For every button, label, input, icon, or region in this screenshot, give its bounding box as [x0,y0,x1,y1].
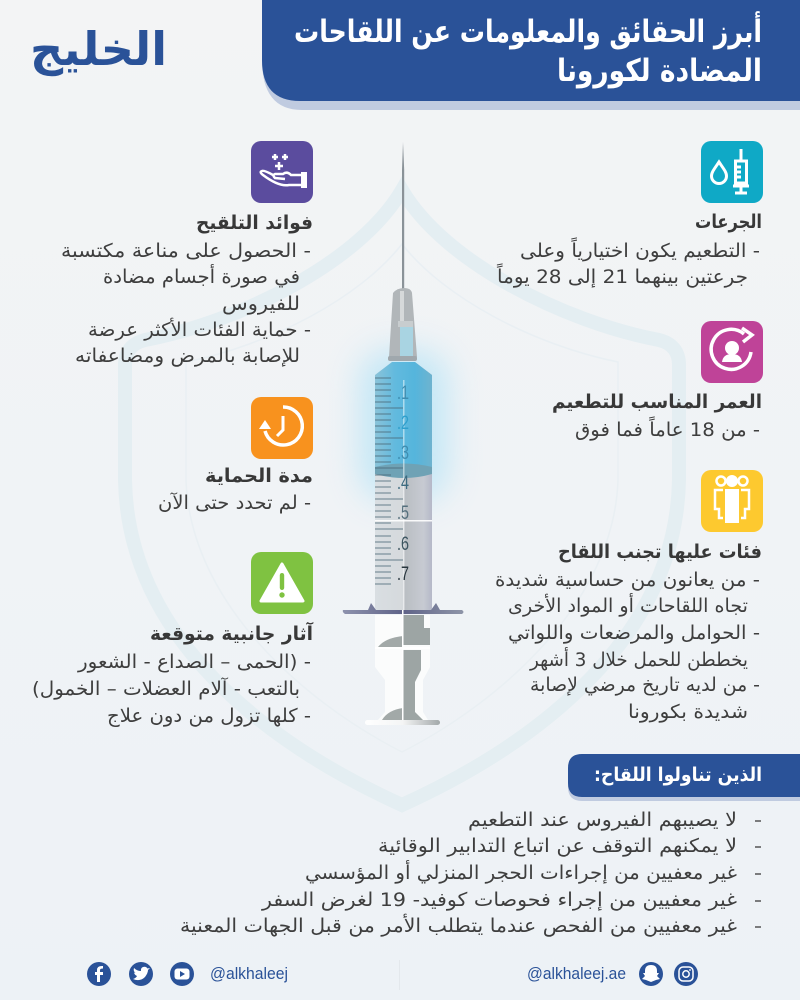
text: vaccination benefits: - حماية الفئات الأكثر عرضة [88,318,311,341]
text: vaccination benefits: للفيروس [222,293,300,315]
icon: snapchat [639,962,663,986]
panel: protection duration [158,397,313,514]
text: vaccination benefits: - الحصول على مناعة مكتسبة [61,240,311,262]
plunger [365,610,440,725]
panel: doses [497,141,763,289]
icon: droplet and syringe [701,141,763,203]
panel: groups to avoid vaccine [495,470,763,723]
heading: groups to avoid vaccine: فئات عليها تجنب اللقاح [558,541,762,563]
scale numbers: .6 [397,534,409,555]
list: غير معفيين من الفحص عندما يتطلب الأمر من قبل الجهات المعنية [180,914,737,937]
text: expected side effects: - (الحمى – الصداع - الشعور [77,651,311,673]
heading: protection duration: مدة الحماية [205,465,313,487]
heading bar [568,754,800,801]
icon: clock with arrow [251,397,313,459]
text: groups to avoid vaccine: - من يعانون من حساسية شديدة [495,569,760,591]
handle left: @alkhaleej [210,964,288,983]
text: protection duration: - لم تحدد حتى الآن [158,492,311,514]
needle [402,142,404,290]
needle hub [388,288,417,361]
text: vaccination benefits [61,240,311,367]
text: expected side effects: بالتعب - آلام العضلات – الخمول) [32,676,300,700]
icon: youtube [170,962,194,986]
icon: facebook [87,962,111,986]
footer social [87,960,698,990]
text: groups to avoid vaccine [495,569,760,723]
barrel with vaccine [375,362,432,611]
icon: instagram [674,962,698,986]
panel: expected side effects [32,552,313,727]
shield watermark [125,190,679,805]
list: غير معفيين من إجراء فحوصات كوفيد- 19 لغرض السفر [261,889,737,912]
text: vaccination benefits: في صورة أجسام مضادة [103,264,300,288]
scale ticks [375,378,403,584]
text: groups to avoid vaccine: - الحوامل والمرضعات واللواتي [508,622,760,644]
panel: vaccination benefits [61,141,313,367]
scale numbers [397,383,409,585]
list [180,809,761,937]
panel: those who took the vaccine [180,754,800,937]
scale numbers: .7 [397,564,409,585]
finger flange [343,603,464,614]
list: لا يمكنهم التوقف عن اتباع التدابير الوقائية [378,835,737,857]
scale numbers: .5 [397,503,409,524]
handle right: @alkhaleej.ae [527,964,626,983]
list: لا يصيبهم الفيروس عند التطعيم [468,809,737,831]
scale numbers: .1 [397,383,409,404]
icon: three people [701,470,763,532]
header banner [262,0,800,110]
text: doses [497,237,760,289]
heading: expected side effects: آثار جانبية متوقعة [150,621,313,645]
heading: suitable age: العمر المناسب للتطعيم [552,391,762,413]
icon: hand with sparkles [251,141,313,203]
title [294,11,762,89]
scale numbers: .3 [397,443,409,464]
text: doses: جرعتين بينهما 21 إلى 28 يوماً [497,263,748,289]
icon: person in rotating arrow [701,321,763,383]
heading bar: الذين تناولوا اللقاح: [594,764,762,786]
text: groups to avoid vaccine: تجاه اللقاحات أو المواد الأخرى [508,593,748,617]
scale numbers: .2 [397,413,409,434]
title: المضادة لكورونا [557,53,762,89]
panel: suitable age [552,321,763,441]
text: groups to avoid vaccine: يخططن للحمل خلال 3 أشهر [529,647,748,671]
logo: Al Khaleej: الخليج [30,22,167,76]
scale numbers: .4 [397,473,409,494]
text: suitable age: - من 18 عاماً فما فوق [575,416,760,441]
text: groups to avoid vaccine: - من لديه تاريخ مرضي لإصابة [530,674,760,696]
text: groups to avoid vaccine: شديدة بكورونا [628,701,748,723]
text: expected side effects: - كلها تزول من دون علاج [107,705,311,727]
heading: doses: الجرعات [695,211,762,233]
text: expected side effects [32,651,311,727]
syringe glow [360,350,448,500]
icon: twitter [129,962,153,986]
icon: warning triangle [251,552,313,614]
syringe illustration [343,142,464,725]
text: doses: - التطعيم يكون اختيارياً وعلى [520,237,760,262]
heading: vaccination benefits: فوائد التلقيح [196,212,313,234]
text: vaccination benefits: للإصابة بالمرض ومضاعفاته [75,345,300,367]
list: غير معفيين من إجراءات الحجر المنزلي أو المؤسسي [305,860,737,885]
